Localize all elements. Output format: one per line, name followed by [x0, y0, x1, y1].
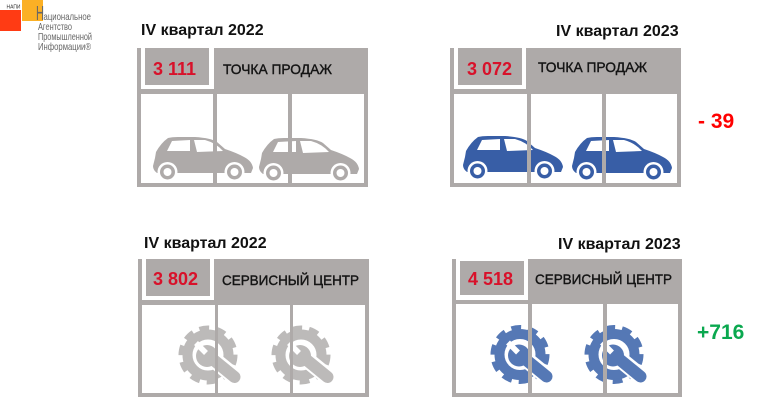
icon: gray gear 1: [181, 328, 235, 382]
label: sales point: ТОЧКА ПРОДАЖ: [538, 59, 647, 75]
value: 3 802: 3 802: [153, 269, 198, 289]
icon: blue gear 2: [587, 328, 641, 382]
label: service center: СЕРВИСНЫЙ ЦЕНТР: [535, 270, 672, 287]
delta: service centers: +716: [697, 321, 744, 344]
heading: IV quarter 2023: IV квартал 2023: [556, 23, 679, 40]
value: 3 111: 3 111: [153, 59, 196, 79]
icon: gray gear 2: [274, 328, 328, 382]
heading: IV quarter 2022: IV квартал 2022: [141, 22, 264, 39]
icon: gray car 1: [153, 137, 253, 182]
logo: Н: [36, 3, 44, 25]
logo: [0, 0, 92, 53]
value: 3 072: 3 072: [467, 59, 512, 79]
icon: gray car 2: [259, 138, 359, 183]
heading: IV quarter 2023: IV квартал 2023: [558, 236, 681, 253]
value: 4 518: 4 518: [468, 269, 513, 289]
delta: sales points: - 39: [698, 110, 734, 133]
panel: sales points 2022: [137, 22, 368, 187]
panel: service centers 2022: [138, 235, 369, 397]
heading: IV quarter 2022: IV квартал 2022: [144, 235, 267, 252]
logo: Промышленной: [38, 31, 92, 43]
icon: blue gear 1: [493, 328, 547, 382]
label: sales point: ТОЧКА ПРОДАЖ: [223, 61, 332, 77]
icon: blue car 1: [463, 136, 563, 181]
logo: Информации®: [38, 41, 91, 53]
logo: ациональное: [44, 11, 91, 23]
icon: blue car 2: [572, 137, 672, 182]
panel: sales points 2023: [450, 23, 681, 187]
panel: service centers 2023: [452, 236, 682, 397]
label: service center: СЕРВИСНЫЙ ЦЕНТР: [222, 271, 359, 288]
logo: Агентство: [38, 21, 72, 33]
logo: НАПИ: [6, 4, 21, 10]
